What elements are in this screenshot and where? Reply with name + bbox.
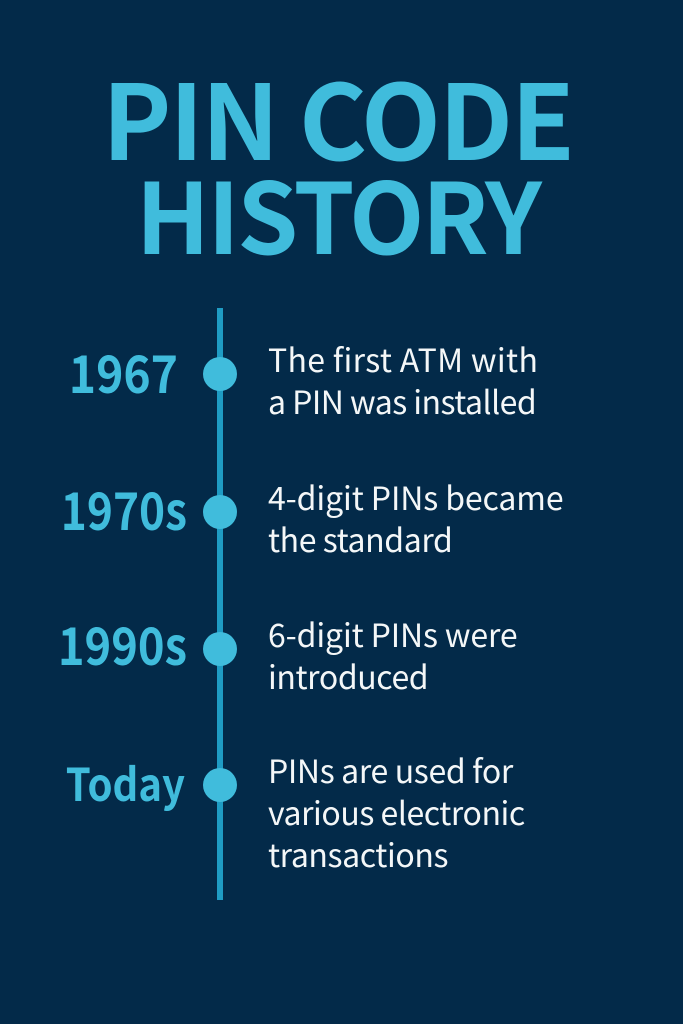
marker: Today — [203, 768, 237, 802]
text: 1967: a PIN was installed — [268, 378, 536, 424]
timeline entry: 1990s — [58, 605, 518, 699]
marker: 1970s — [203, 495, 237, 529]
text: Today: various electronic — [268, 789, 525, 835]
year: 1967: 1967 — [69, 333, 178, 408]
marker: 1967 — [203, 357, 237, 391]
text: 1970s: 4-digit PINs became — [268, 474, 563, 520]
timeline entry: 1967 — [69, 333, 538, 424]
text: 1990s: 6-digit PINs were — [268, 611, 518, 657]
text: 1990s: introduced — [268, 653, 428, 699]
text: Today — [268, 747, 525, 877]
year: 1990s: 1990s — [58, 605, 187, 680]
title: HISTORY — [136, 141, 539, 283]
marker: 1990s — [203, 632, 237, 666]
year: 1970s: 1970s — [61, 470, 187, 545]
timeline entry: 1970s — [61, 470, 563, 562]
text: 1967: The first ATM with — [268, 336, 538, 382]
text: 1967 — [268, 336, 538, 424]
text: 1990s — [268, 611, 518, 699]
timeline entry: Today — [66, 747, 525, 877]
title — [102, 39, 573, 283]
timeline line — [217, 308, 223, 900]
title: PIN CODE — [102, 39, 573, 190]
text: 1970s — [268, 474, 563, 562]
text: 1970s: the standard — [268, 516, 452, 562]
year: Today: Today — [66, 749, 185, 814]
text: Today: PINs are used for — [268, 747, 513, 793]
text: Today: transactions — [268, 831, 448, 877]
